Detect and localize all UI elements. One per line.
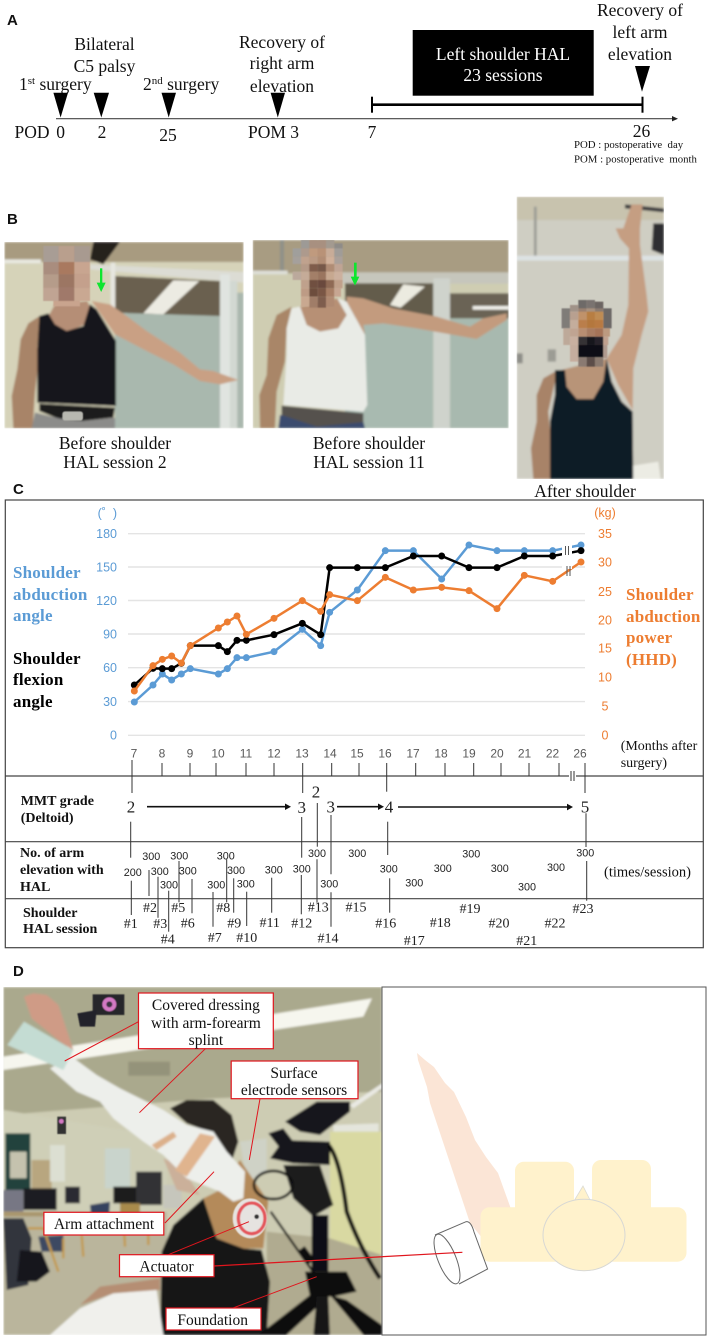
event: first surgery label: 1	[19, 74, 28, 94]
panel C: chart and table	[5, 481, 703, 949]
event: second surgery label: 2	[143, 74, 152, 94]
axis title: shoulder abduction power: power	[626, 628, 673, 647]
callout: surface electrode sensors	[231, 1061, 358, 1099]
series: abduction angle	[131, 541, 584, 705]
callout: foundation: Foundation	[177, 1312, 248, 1329]
photo: after sessions	[517, 197, 664, 479]
row: arm elevation counts: (times/session)	[604, 864, 691, 880]
row: session numbers: #13	[308, 900, 329, 916]
callout: covered dressing: splint	[189, 1032, 224, 1049]
timeline tick labels: 2	[98, 122, 106, 142]
blurred head and mask mosaic	[562, 300, 612, 367]
black box: left shoulder HAL sessions	[413, 30, 594, 96]
black box: left shoulder HAL sessions: 23 sessions	[463, 65, 543, 85]
panel letter A: A	[7, 12, 18, 29]
photo: patient with shoulder HAL	[3, 987, 382, 1335]
captions: Before shoulder	[59, 433, 171, 453]
axis title: shoulder abduction angle: angle	[13, 606, 53, 625]
row: MMT grade: 4	[385, 798, 394, 816]
ceiling camera	[57, 994, 124, 1134]
panel letter C: C	[13, 481, 24, 498]
x axis month labels: 22	[546, 746, 559, 760]
row: arm elevation counts: 300	[227, 865, 245, 877]
schematic actuator cylinder	[429, 1222, 488, 1287]
event: recovery of left arm elevation label: elevation	[608, 44, 672, 64]
callout: covered dressing: Covered dressing	[152, 997, 260, 1014]
axis title: shoulder abduction power: abduction	[626, 607, 701, 626]
x axis month labels: 13	[295, 746, 309, 760]
row: session numbers: #23	[572, 902, 594, 917]
timeline tick labels: 0	[56, 122, 65, 142]
captions: HAL session 11	[313, 452, 425, 472]
event: recovery of right arm elevation label: Recovery of	[239, 32, 325, 52]
timeline tick labels	[14, 121, 650, 145]
series: flexion angle	[131, 547, 584, 688]
row: session numbers: #8	[216, 901, 230, 916]
row: session numbers: #19	[460, 902, 480, 917]
left axis labels: 30	[103, 695, 117, 709]
row: session numbers: #15	[346, 900, 366, 916]
right axis labels: 5	[602, 700, 609, 714]
row: session numbers: #17	[404, 934, 425, 949]
row: session numbers: HAL session	[23, 922, 98, 937]
row: MMT grade: 5	[581, 798, 589, 816]
chart gridlines	[128, 534, 585, 735]
axis title: shoulder flexion angle: angle	[13, 692, 53, 711]
event: bilateral C5 palsy label: C5 palsy	[74, 56, 136, 76]
row: session numbers: #12	[291, 916, 312, 932]
x axis month labels: 26	[573, 746, 587, 760]
row: session numbers: #4	[161, 932, 175, 948]
row: session numbers: #18	[430, 916, 451, 931]
blurred head mosaic	[293, 240, 343, 308]
captions: HAL session 2	[63, 452, 167, 472]
row: arm elevation counts: 300	[160, 880, 178, 892]
row: MMT grade	[21, 782, 589, 874]
row: arm elevation counts: 300	[380, 864, 398, 876]
left axis labels	[96, 506, 117, 742]
row: session numbers: #11	[259, 916, 280, 931]
row: session numbers: #10	[236, 931, 257, 946]
x axis month labels: 15	[350, 746, 364, 760]
right axis labels: 30	[598, 556, 612, 570]
schematic box	[382, 987, 706, 1335]
timeline tick labels: 25	[159, 125, 177, 145]
row: arm elevation counts: 300	[308, 848, 326, 860]
schematic arm	[417, 1053, 511, 1250]
event: first surgery label: surgery	[35, 74, 92, 94]
timeline axis arrow	[56, 116, 678, 121]
right axis labels: 35	[598, 527, 612, 541]
left axis labels: (˚ )	[98, 506, 117, 520]
x axis month labels: 18	[434, 746, 448, 760]
captions: Before shoulder	[313, 433, 425, 453]
row: MMT grade: 2	[127, 798, 135, 816]
left axis labels: 120	[96, 594, 117, 608]
x axis month labels: 17	[406, 746, 420, 760]
abbreviation legend: POD : postoperative day	[574, 139, 684, 151]
event: bilateral C5 palsy label: Bilateral	[74, 34, 135, 54]
row: arm elevation counts: 300	[491, 863, 509, 875]
row: session numbers: #20	[488, 916, 510, 932]
HAL period bar	[372, 97, 642, 113]
row: arm elevation counts: elevation with	[20, 863, 104, 878]
row: session numbers: #6	[181, 916, 195, 932]
left axis labels: 0	[110, 728, 117, 742]
schematic head	[543, 1186, 625, 1271]
right axis labels: 15	[598, 642, 612, 656]
callout: arm attachment	[44, 1212, 164, 1235]
callout: covered dressing	[138, 993, 273, 1049]
event: recovery of right arm elevation label: right arm	[250, 53, 315, 73]
row: session numbers: #16	[375, 916, 396, 932]
row: MMT grade: 2	[312, 782, 320, 802]
x axis month labels: 11	[240, 746, 253, 760]
axis title: shoulder abduction power: (HHD)	[626, 650, 677, 669]
row: arm elevation counts: 300	[151, 866, 169, 878]
row: arm elevation counts: 300	[434, 863, 452, 875]
green arrow	[97, 268, 106, 292]
row: MMT grade: 3	[326, 798, 335, 816]
callout: actuator	[120, 1255, 214, 1277]
captions: After shoulder	[534, 481, 636, 501]
row: arm elevation counts: 300	[518, 881, 536, 893]
row: MMT grade: 3	[297, 798, 306, 817]
left axis labels: 90	[103, 628, 117, 642]
left axis labels: 60	[103, 661, 117, 675]
x axis month labels: 20	[490, 746, 504, 760]
row: session numbers: #2	[143, 901, 157, 916]
axis title: shoulder abduction power: Shoulder	[626, 585, 694, 604]
x axis month labels: 16	[378, 746, 392, 760]
left axis labels: 150	[96, 560, 117, 574]
x axis month labels: 14	[323, 746, 337, 760]
row: session numbers: #22	[544, 916, 566, 932]
axis title: shoulder flexion angle: Shoulder	[13, 649, 81, 668]
panel B: photographs	[4, 197, 664, 501]
row: arm elevation counts: 300	[293, 863, 311, 875]
row: arm elevation counts: 300	[462, 849, 480, 861]
blurred head mosaic	[43, 246, 90, 306]
panel letter D: D	[13, 963, 24, 980]
right axis labels: 25	[598, 585, 612, 599]
x axis month labels: 21	[518, 746, 531, 760]
row: arm elevation counts: 300	[547, 862, 565, 874]
timeline tick labels: POM 3	[248, 122, 299, 142]
right axis labels: (kg)	[594, 506, 616, 520]
event: recovery of right arm elevation label: elevation	[250, 76, 314, 96]
timeline tick labels: 7	[368, 122, 377, 142]
row: arm elevation counts: 300	[237, 878, 255, 890]
panel D: HAL setup	[3, 963, 706, 1335]
actuator on shoulder	[233, 1198, 267, 1238]
row: arm elevation counts: 300	[348, 848, 366, 860]
series: abduction power	[131, 558, 584, 694]
black box: left shoulder HAL sessions: Left shoulder HAL	[436, 44, 570, 64]
x axis month labels: 10	[211, 746, 225, 760]
event: recovery of left arm elevation label: left arm	[613, 22, 668, 42]
x axis month labels: 19	[462, 746, 476, 760]
event: recovery of left arm elevation label: Recovery of	[597, 0, 683, 20]
x axis month labels: 12	[267, 746, 281, 760]
row: arm elevation counts: 300	[170, 850, 188, 862]
x axis month labels: 9	[187, 746, 194, 760]
row: session numbers: #7	[208, 931, 222, 946]
row: session numbers: Shoulder	[23, 906, 77, 921]
x axis ticks	[132, 760, 585, 793]
row: MMT grade: (Deltoid)	[21, 811, 74, 826]
row: session numbers: #3	[153, 917, 167, 932]
event: second surgery label: surgery	[163, 74, 220, 94]
row: arm elevation counts	[20, 846, 691, 895]
line chart series	[131, 541, 584, 705]
axis title: shoulder flexion angle: flexion	[13, 670, 64, 689]
row: arm elevation counts: No. of arm	[20, 846, 84, 861]
captions	[59, 433, 636, 501]
marker triangles	[53, 66, 650, 118]
x axis month labels: 8	[159, 746, 166, 760]
belt buckle	[62, 411, 83, 421]
right axis labels	[594, 506, 616, 742]
row: arm elevation counts: 300	[320, 878, 338, 890]
row: session numbers: #5	[171, 901, 185, 916]
callout: surface electrode sensors: electrode sensors	[241, 1082, 347, 1099]
callout: foundation	[166, 1308, 261, 1330]
panel A: timeline	[7, 0, 698, 166]
row: session numbers: #21	[516, 934, 537, 949]
leader lines	[65, 1022, 462, 1308]
event: second surgery label: nd	[152, 75, 163, 87]
x axis month labels: 7	[131, 746, 138, 760]
left axis labels: 180	[96, 527, 117, 541]
x axis month labels	[131, 746, 587, 760]
row: session numbers	[23, 859, 594, 949]
row: arm elevation counts: 300	[405, 878, 423, 890]
row: arm elevation counts: 300	[576, 848, 594, 860]
axis title: shoulder abduction angle: Shoulder	[13, 563, 81, 582]
schematic seat and shoulder blocks	[480, 1160, 686, 1262]
x axis unit: surgery)	[621, 756, 667, 771]
row: arm elevation counts: 300	[179, 865, 197, 877]
photo: before session 2	[4, 242, 244, 428]
abbreviation legend: POM : postoperative month	[574, 154, 698, 166]
panel letter B: B	[7, 211, 18, 228]
callout: surface electrode sensors: Surface	[270, 1065, 318, 1082]
callout: arm attachment: Arm attachment	[54, 1216, 155, 1233]
timeline tick labels: POD	[14, 122, 50, 142]
row: session numbers: #14	[318, 932, 338, 946]
row: arm elevation counts: HAL	[20, 880, 50, 895]
row: arm elevation counts: 300	[142, 851, 160, 863]
table frame	[5, 500, 703, 948]
row: arm elevation counts: 300	[265, 864, 283, 876]
x axis unit: (Months after	[621, 739, 698, 754]
callout: actuator: Actuator	[139, 1258, 194, 1276]
photo: before session 11	[253, 240, 509, 428]
row: session numbers: #9	[227, 916, 241, 932]
event: first surgery label: st	[28, 75, 35, 87]
row: MMT grade: MMT grade	[21, 794, 94, 809]
green arrow	[351, 263, 359, 286]
row: arm elevation counts: 300	[207, 880, 225, 892]
timeline tick labels: 26	[633, 121, 650, 141]
right axis labels: 20	[598, 614, 612, 628]
row: session numbers: #1	[124, 917, 138, 932]
axis title: shoulder abduction angle: abduction	[13, 585, 88, 604]
row: arm elevation counts: 200	[124, 867, 142, 879]
right axis labels: 10	[598, 670, 612, 684]
right axis labels: 0	[602, 728, 609, 742]
callout: covered dressing: with arm-forearm	[151, 1015, 261, 1032]
axis break marks on series	[562, 544, 572, 576]
abbreviation legend	[574, 139, 698, 166]
row: arm elevation counts: 300	[217, 850, 235, 862]
